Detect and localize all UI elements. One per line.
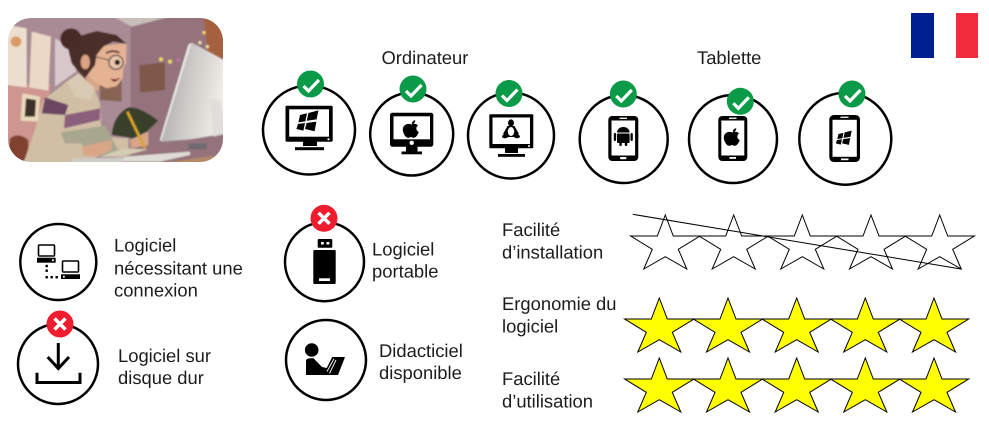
icon: Android tablet, supported [580, 80, 668, 183]
label: ergonomics: Ergonomie du [502, 293, 617, 314]
icon: windows logo [836, 131, 852, 145]
rating: ease of installation, struck out [631, 214, 974, 269]
glasses, eye, brow, mouth [109, 55, 123, 69]
label: ease of use: Facilité [502, 368, 560, 389]
label: ease of use [502, 368, 593, 412]
icon: portable software, not applicable [285, 205, 364, 301]
icon: Windows tablet, supported [799, 80, 891, 185]
label: hard disk: disque dur [118, 367, 204, 388]
icon: android robot [614, 127, 633, 146]
label: hard disk: Logiciel sur [118, 345, 211, 366]
desk and keyboard [168, 155, 216, 162]
string lights [159, 57, 163, 61]
badge: green check [400, 76, 426, 102]
badge: red cross [310, 205, 338, 232]
label: tutorial [379, 340, 463, 383]
label: ease of installation: d’installation [502, 242, 603, 262]
badge: green check [610, 80, 637, 108]
monitor [161, 43, 227, 142]
label: connection: connexion [114, 280, 198, 300]
label: ergonomics: logiciel [502, 316, 558, 336]
label: portable: Logiciel [372, 238, 434, 260]
badge: red cross [46, 310, 74, 338]
illustration: woman working at a computer [7, 17, 227, 163]
rating: ergonomics, five stars [625, 298, 969, 352]
icon: software on hard disk, not applicable [18, 310, 98, 404]
label: portable [372, 238, 438, 282]
label: connection: nécessitant une [114, 258, 243, 278]
icon: iPad tablet, supported [689, 88, 777, 183]
label: tutorial: disponible [379, 362, 462, 383]
icon: apple logo [403, 120, 419, 138]
notebook and hands [61, 126, 122, 157]
hair [68, 31, 127, 78]
icon: Windows computer, supported [263, 70, 355, 174]
corkboard and frame [139, 62, 165, 93]
icon: apple logo [724, 128, 740, 146]
heading: Tablette: Tablette [697, 47, 761, 68]
icon: software requiring a connection [20, 224, 96, 300]
label: connection: Logiciel [114, 234, 176, 256]
badge: green check [496, 80, 522, 107]
flag: France [911, 13, 978, 58]
label: connection [114, 234, 243, 300]
sweater [23, 82, 128, 163]
heading: Ordinateur: Ordinateur [382, 47, 468, 68]
face [83, 43, 127, 88]
label: ease of installation [502, 219, 603, 262]
icon: tutorial available [286, 320, 366, 400]
icon: Linux computer, supported [468, 80, 554, 178]
label: ease of use: d’utilisation [502, 390, 593, 412]
icon: penguin [502, 119, 520, 138]
label: ergonomics [502, 293, 617, 336]
neck and collar [85, 75, 100, 92]
label: tutorial: Didacticiel [379, 340, 463, 361]
rating: ease of use, five stars [625, 358, 969, 412]
wall [130, 18, 223, 162]
badge: green check [297, 70, 324, 98]
label: portable: portable [372, 260, 438, 282]
badge: green check [838, 80, 866, 108]
plant [112, 107, 158, 138]
badge: green check [727, 88, 754, 115]
label: ease of installation: Facilité [502, 219, 560, 240]
label: hard disk [118, 345, 211, 388]
icon: Mac computer, supported [370, 76, 453, 176]
posters [7, 25, 27, 87]
